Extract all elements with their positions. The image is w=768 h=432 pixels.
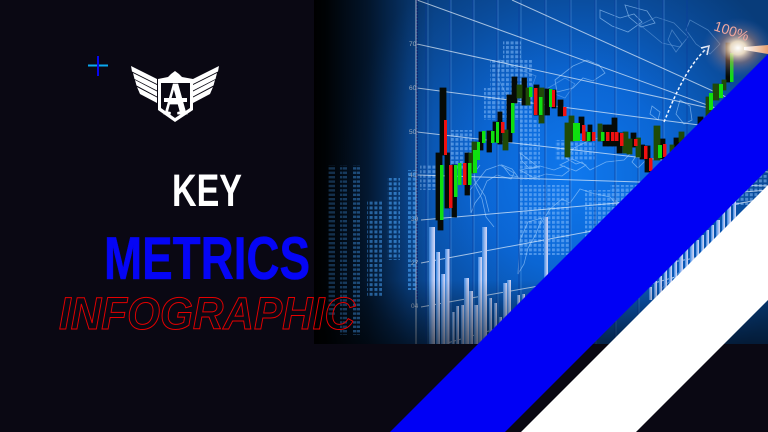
shield — [158, 71, 193, 122]
blue and white bar chart — [429, 200, 736, 344]
left fade of photo — [314, 0, 434, 344]
dot matrix data blocks — [420, 40, 768, 260]
vertical axis — [416, 0, 417, 344]
right wing — [193, 66, 219, 103]
left wing — [131, 66, 157, 103]
axis labels: 70 — [409, 41, 417, 48]
faded data columns at left — [328, 165, 417, 335]
heading: INFOGRAPHIC outlined: INFOGRAPHIC — [59, 288, 356, 339]
bottom shade of photo — [338, 284, 768, 344]
heading: METRICS: METRICS — [104, 225, 310, 292]
diagonal white stripe — [521, 185, 768, 432]
axis labels: 40 — [409, 172, 417, 179]
dashed growth arrow — [664, 46, 709, 122]
axis labels: 30 — [411, 216, 419, 223]
star: ★ — [171, 70, 179, 79]
candlestick chart — [436, 43, 734, 230]
axis labels — [409, 41, 419, 310]
stock chart photo panel — [314, 0, 768, 344]
world map outlines — [470, 5, 720, 300]
glow and 100% peak label: 100% — [712, 18, 751, 44]
glow and 100% peak label — [704, 21, 768, 76]
axis labels: 50 — [409, 129, 417, 136]
plus icon — [88, 56, 108, 76]
letter A: A — [164, 73, 188, 124]
logo: winged shield — [131, 66, 219, 124]
axis labels: 60 — [409, 85, 417, 92]
axis labels: 27 — [411, 260, 419, 267]
heading: KEY: KEY — [172, 165, 242, 216]
diagonal blue stripe — [390, 54, 768, 432]
axis labels: 04 — [411, 303, 419, 310]
grid lines — [426, 0, 687, 344]
